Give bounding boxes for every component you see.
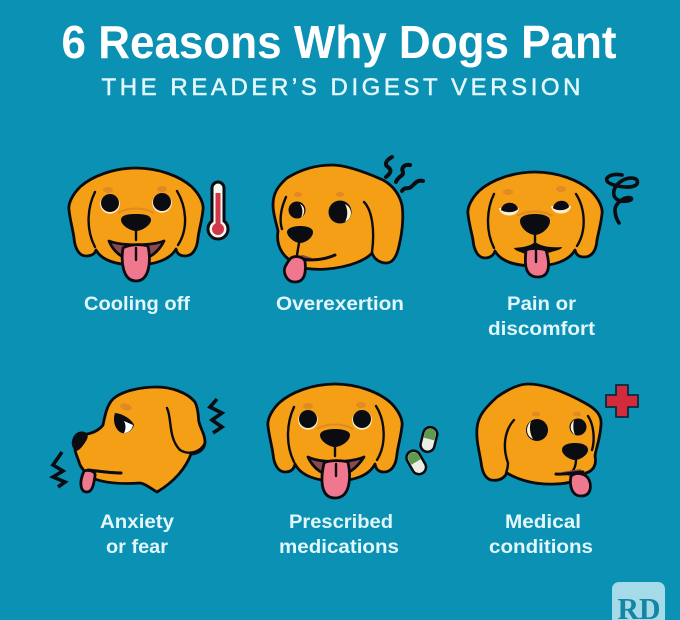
title: 6 Reasons Why Dogs Pant [62, 16, 616, 68]
logo: RD [612, 582, 665, 620]
icon: dog overexertion [273, 165, 403, 282]
label: prescribed medications: medications [279, 537, 399, 558]
icon: heat squiggles [386, 157, 423, 191]
label: prescribed medications [279, 512, 399, 558]
icon: dog medical conditions [477, 384, 601, 496]
icon: thermometer [208, 182, 228, 239]
label: anxiety or fear: Anxiety [100, 512, 174, 533]
icon: anxiety zigzag left [53, 452, 65, 487]
label: anxiety or fear [100, 512, 174, 558]
subtitle: THE READER’S DIGEST VERSION [102, 74, 580, 101]
icon: pain scribble [607, 174, 637, 223]
icon: capsule bottom [404, 448, 429, 477]
label: medical conditions [489, 512, 593, 558]
icon: capsule top [419, 426, 439, 453]
label: pain or discomfort [488, 294, 596, 340]
icon: medical cross [606, 385, 638, 417]
icon: dog pain or discomfort [468, 172, 602, 277]
label: pain or discomfort: Pain or [507, 294, 577, 315]
label: pain or discomfort: discomfort [488, 319, 596, 340]
label: cooling off: Cooling off [84, 294, 191, 315]
label: prescribed medications: Prescribed [289, 512, 393, 533]
label: medical conditions: conditions [489, 537, 593, 558]
icon: dog prescribed medications [268, 384, 402, 498]
icon: dog cooling off [69, 168, 203, 281]
icon: anxiety zigzag right [210, 399, 222, 433]
icon: dog anxiety profile [72, 387, 205, 492]
label: overexertion: Overexertion [276, 294, 404, 315]
label: anxiety or fear: or fear [106, 537, 169, 558]
label: medical conditions: Medical [505, 512, 581, 533]
